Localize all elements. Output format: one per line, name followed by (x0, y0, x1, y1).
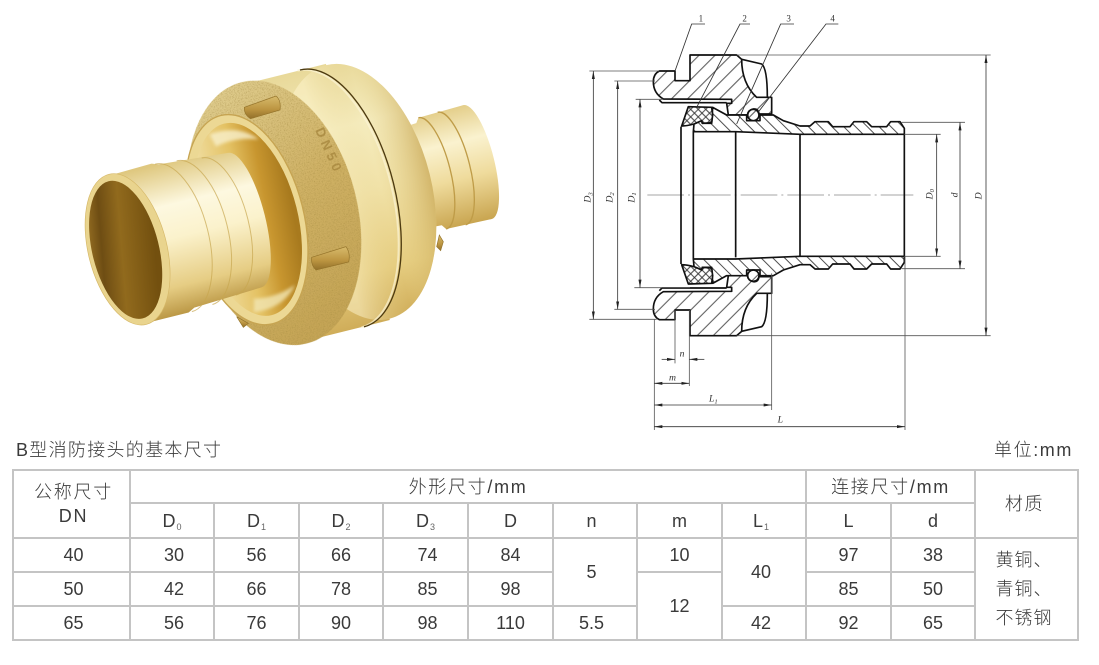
part numbers: 2 (742, 13, 747, 23)
dimension labels: 3 (587, 192, 594, 197)
row DN50: 98 (500, 579, 521, 599)
part numbers: 1 (699, 13, 703, 23)
row DN65: 65 (923, 613, 943, 633)
product photo: brass coupling (84, 64, 500, 346)
upper half section (653, 55, 904, 134)
row DN65: 5.5 (579, 613, 604, 633)
header row 2: D3 (416, 510, 435, 532)
row DN50: 50 (923, 579, 943, 599)
row DN50: 85 (838, 579, 859, 599)
header row 1: DN (59, 506, 88, 526)
table title: B型消防接头的基本尺寸 (16, 440, 222, 460)
header row 2: n (586, 510, 596, 530)
header row 2 (162, 510, 938, 532)
row DN65: 92 (838, 613, 859, 633)
dimension labels: D (583, 196, 594, 203)
header row 2: D1 (247, 510, 266, 532)
row DN40: 5 (586, 562, 596, 582)
row DN65: 98 (417, 613, 438, 633)
row DN40: 56 (246, 545, 267, 565)
header row 1: 公称尺寸 (34, 482, 113, 502)
row DN40: 10 (669, 545, 690, 565)
outer nut body (242, 46, 462, 341)
row DN65: 90 (331, 613, 351, 633)
centre line (647, 194, 913, 196)
row DN65: 76 (246, 613, 267, 633)
lower o-ring (748, 270, 759, 281)
header row 2: d (928, 510, 938, 530)
section drawing with dimensions (583, 13, 991, 430)
lower nut (653, 276, 772, 336)
upper o-ring (748, 109, 759, 121)
header row 2: L1 (753, 510, 769, 532)
part numbers: 4 (830, 13, 835, 23)
dimension labels: D (974, 192, 985, 200)
row DN40: 40 (751, 562, 771, 582)
dimension labels: L (777, 415, 783, 426)
dimension labels: n (680, 349, 685, 360)
lugs (237, 96, 443, 327)
upper nut (653, 55, 772, 115)
row DN40: 38 (923, 545, 943, 565)
row DN40: 84 (500, 545, 521, 565)
header row 1: 材质 (1005, 494, 1044, 514)
left tube opening (71, 165, 184, 334)
dimension labels: D (924, 192, 935, 199)
row DN65 (63, 613, 943, 633)
header row 2: D0 (162, 510, 182, 532)
lower body (693, 256, 904, 283)
header row 2: D2 (331, 510, 350, 532)
part numbers: 3 (786, 13, 791, 23)
upper seal (682, 107, 713, 126)
row DN40: 黄铜、 (996, 550, 1053, 570)
row DN40 (63, 545, 1053, 628)
row DN40: 74 (417, 545, 438, 565)
header row 1 (34, 476, 1053, 633)
header row 2: m (672, 510, 687, 530)
dimension labels (583, 188, 985, 426)
row DN65: 42 (751, 613, 771, 633)
extension lines (589, 55, 991, 430)
header row 2: L (844, 510, 854, 530)
dimension labels: d (949, 192, 960, 197)
row DN50: 66 (246, 579, 267, 599)
unit note: 单位:mm (994, 440, 1073, 460)
part leaders (675, 24, 838, 124)
header row 1: 青铜、 (996, 578, 1053, 598)
lower nut outer curve (659, 288, 767, 331)
row DN65: 110 (496, 613, 525, 633)
bore lines (681, 127, 904, 264)
header row 1: 外形尺寸/mm (409, 476, 527, 496)
row DN65: 65 (63, 613, 84, 633)
row DN50: 42 (164, 579, 184, 599)
lower half section (653, 256, 904, 336)
dimension labels: 0 (929, 188, 936, 192)
dimension labels: 2 (609, 192, 616, 196)
dimension labels: D (626, 196, 637, 203)
row DN50: 50 (63, 579, 84, 599)
right tube (370, 101, 508, 242)
header row 1: 不锈钢 (996, 608, 1053, 628)
recess ring (165, 102, 328, 338)
row DN50: 12 (669, 596, 690, 616)
part numbers (699, 13, 835, 23)
left tube (106, 140, 283, 324)
dimension labels: m (669, 373, 676, 384)
dimension labels: 1 (714, 398, 718, 405)
header row 2: D (504, 510, 517, 530)
header row 1: 连接尺寸/mm (831, 476, 950, 496)
lower seal (682, 265, 713, 284)
dimension labels: D (604, 196, 615, 203)
dimension labels: L (709, 394, 714, 405)
flange marking: DN50 (312, 125, 346, 177)
upper body (693, 107, 904, 134)
row DN50 (63, 579, 943, 616)
row DN50: 78 (331, 579, 351, 599)
knurled flange (161, 62, 388, 364)
row DN40: 30 (164, 545, 184, 565)
upper nut outer curve (659, 59, 767, 103)
dimensions table (12, 469, 1079, 641)
row DN40: 97 (838, 545, 859, 565)
dimension labels: 1 (631, 192, 638, 196)
row DN65: 56 (164, 613, 184, 633)
row DN40: 40 (63, 545, 84, 565)
row DN40: 66 (331, 545, 351, 565)
row DN50: 85 (417, 579, 438, 599)
dimension arrows (593, 55, 986, 427)
